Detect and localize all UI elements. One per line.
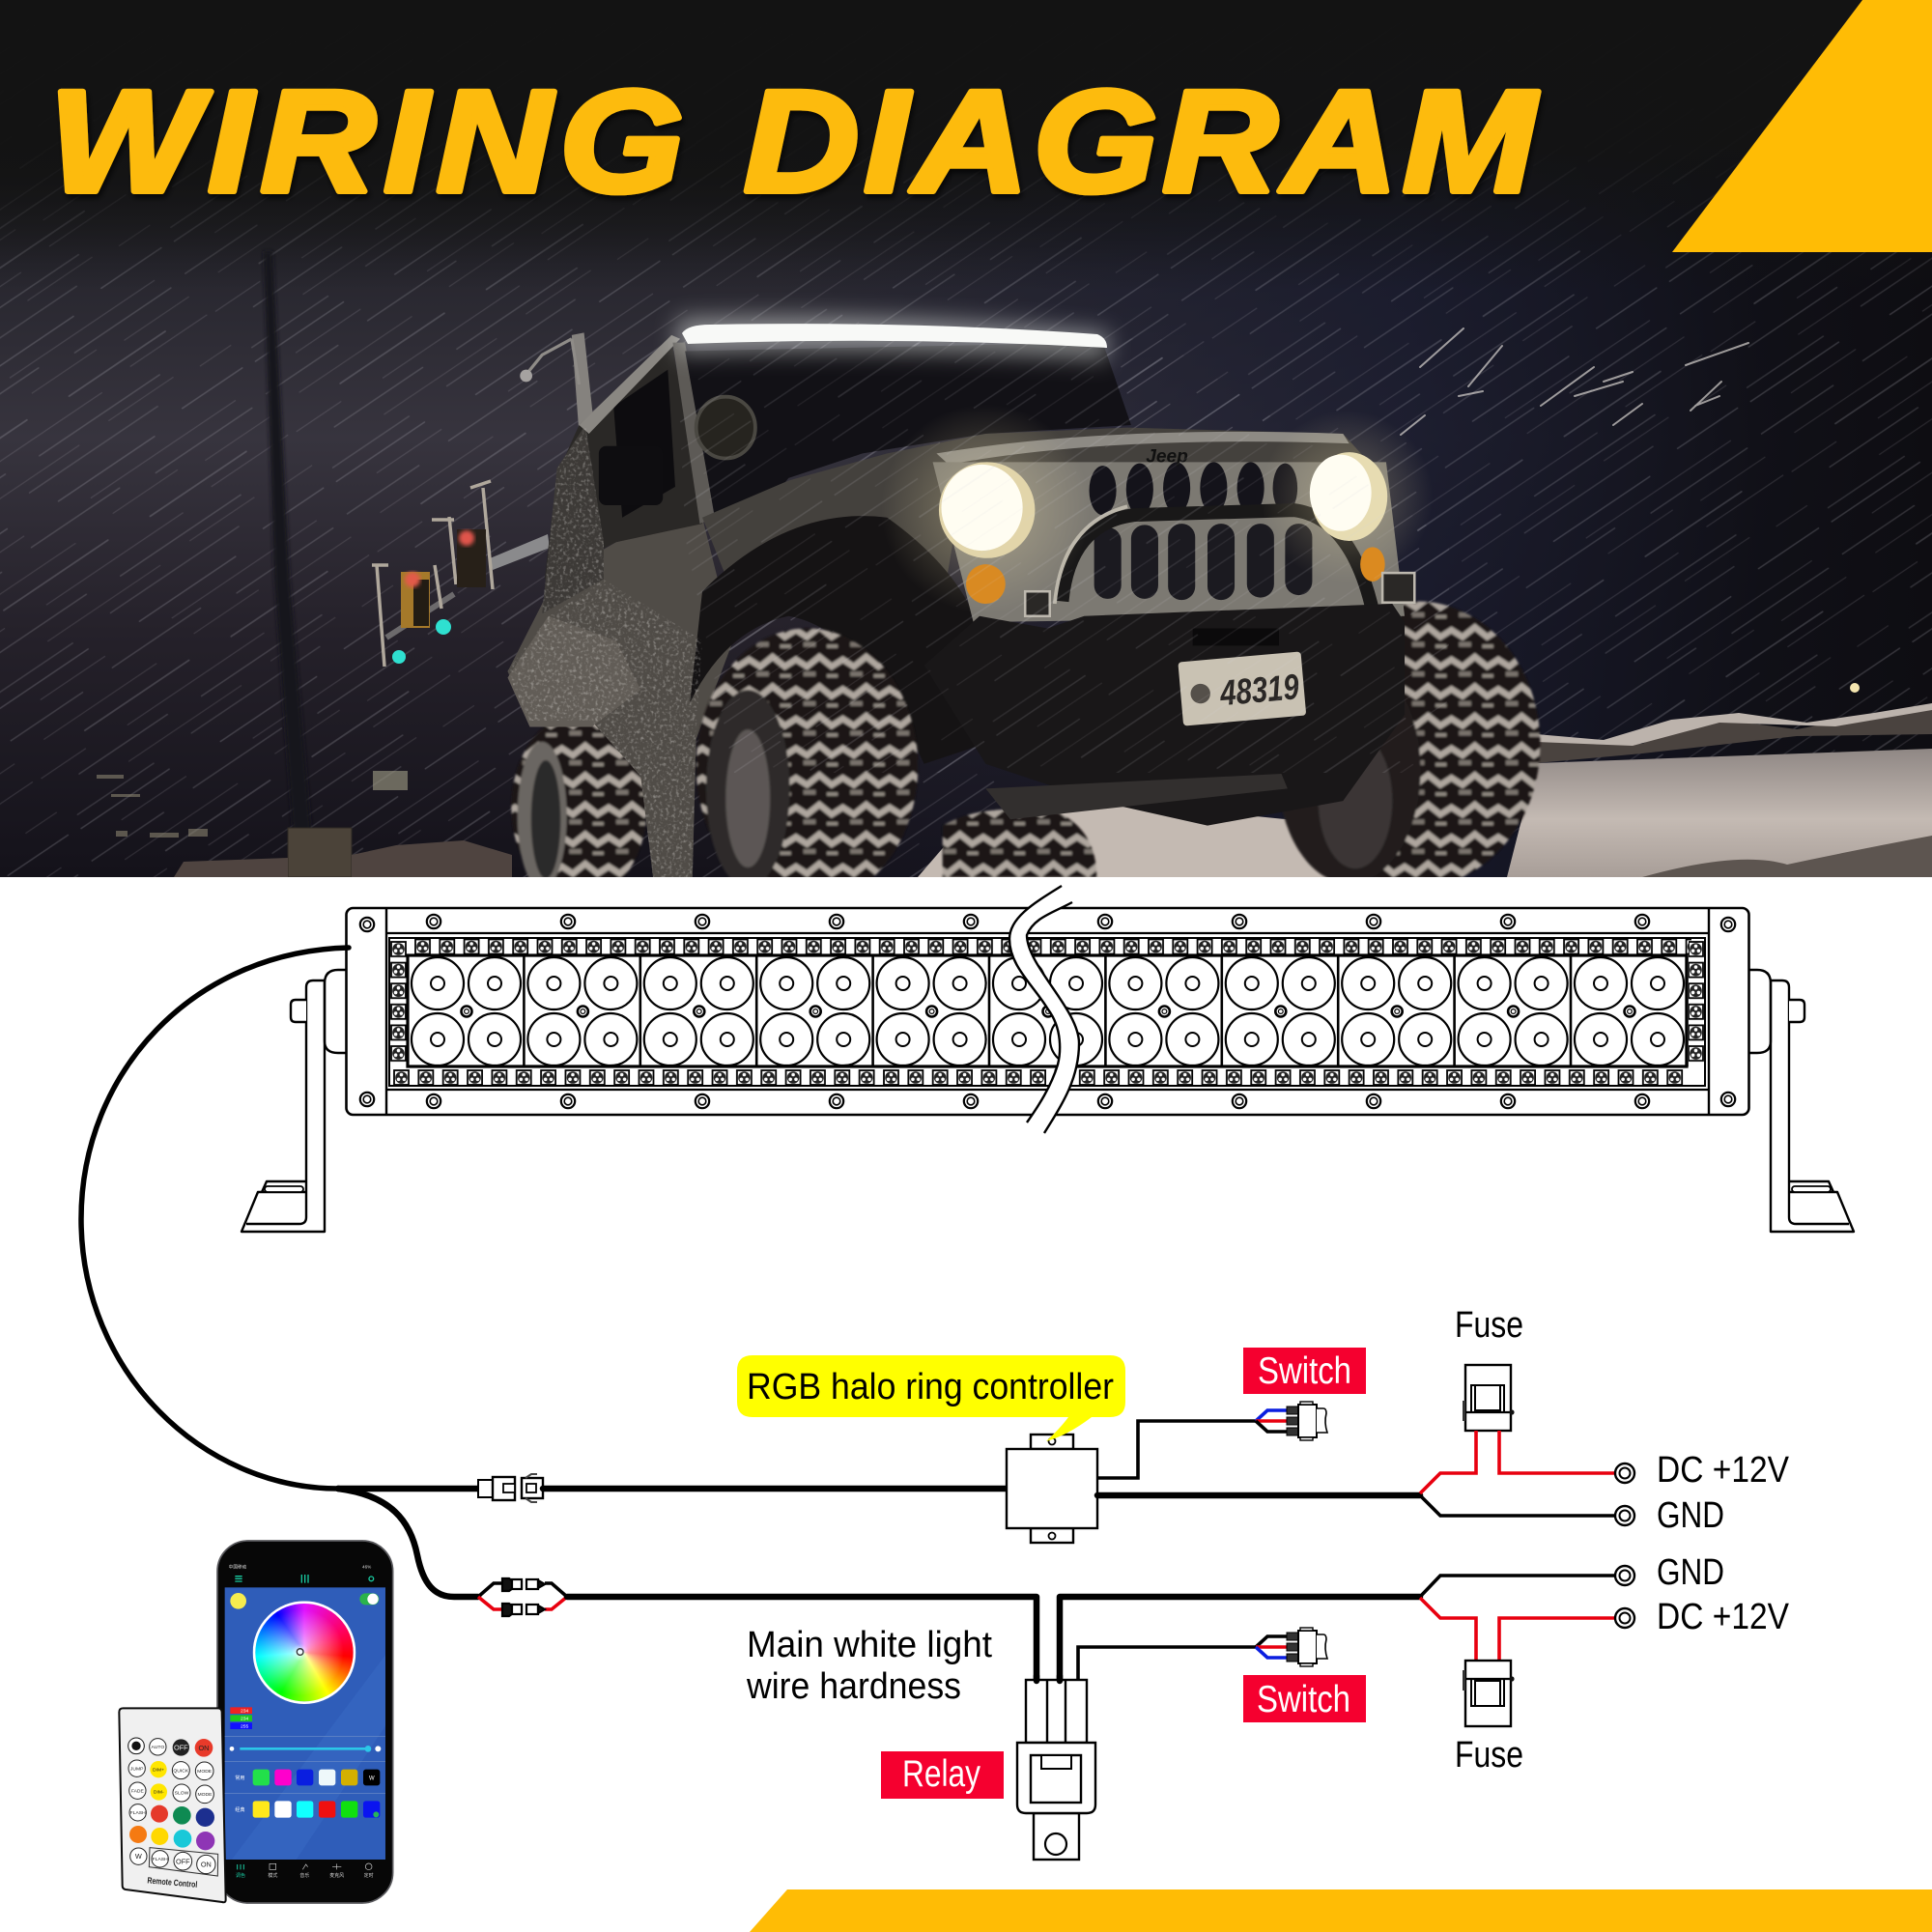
mirror [599, 446, 663, 505]
distant city lights [97, 771, 408, 838]
remote buttons row six: ON [201, 1861, 212, 1869]
remote control [119, 1708, 226, 1902]
label: DC +12V upper: DC +12V [1657, 1450, 1790, 1491]
swatch row two [235, 1801, 380, 1818]
right mount bracket [1749, 970, 1854, 1232]
hood front edge [936, 432, 1350, 465]
remote buttons row three: DIM- [154, 1790, 164, 1796]
relay [1017, 1680, 1095, 1860]
smartphone app [217, 1541, 393, 1903]
tab bar: 模式 [268, 1872, 277, 1879]
bull bar [1062, 510, 1374, 616]
cab side dark area [545, 339, 702, 579]
label: DC +12V lower: DC +12V [1657, 1597, 1790, 1637]
licence plate: 48319 [1218, 667, 1301, 713]
main harness wire from light bar [81, 948, 349, 1489]
status bar: 中国移动 [229, 1563, 247, 1570]
RGB controller box [1007, 1435, 1097, 1543]
roof post and side mirror arm [520, 332, 594, 434]
title band triangle [1672, 0, 1932, 252]
colour preview [230, 1593, 246, 1609]
hero photo: jeep with light bar in snowstorm [0, 0, 1932, 904]
rear tire [510, 724, 647, 877]
remote buttons row two: MODE [197, 1769, 213, 1775]
remote buttons row six: OFF [176, 1857, 190, 1865]
remote buttons row three [129, 1782, 213, 1804]
remote buttons row three: FADE [131, 1788, 145, 1794]
snow streak texture [0, 169, 1932, 877]
traffic lights [372, 481, 550, 667]
remote buttons row two [128, 1760, 213, 1780]
jeep vehicle [508, 332, 1540, 904]
remote buttons row five [129, 1826, 214, 1850]
title [49, 61, 1539, 222]
RGB readout: 234 [241, 1717, 249, 1722]
white light wire right [1060, 1597, 1420, 1681]
bumper and underbody [924, 604, 1405, 826]
main light plug connector [478, 1578, 567, 1616]
tab bar [236, 1863, 374, 1879]
top dark fade [0, 0, 1932, 290]
label: main white light wire harness [746, 1625, 992, 1707]
remote buttons row four: FLASH [130, 1810, 146, 1816]
dividers [225, 1736, 385, 1794]
controller power wire [1097, 1492, 1420, 1498]
relay wire ends [1037, 1676, 1060, 1681]
controller switch wire [1097, 1421, 1256, 1478]
label: lower fuse: Fuse [1455, 1735, 1523, 1776]
A-pillar [672, 343, 715, 524]
RGB readout: 234 [241, 1709, 249, 1715]
remote buttons row six: W [135, 1852, 142, 1861]
label: relay: Relay [902, 1753, 980, 1795]
status bar [229, 1563, 371, 1570]
bar screws [360, 915, 1735, 1108]
roof rail [579, 335, 680, 434]
bright snow streaks [1401, 328, 1748, 435]
winch [1193, 629, 1279, 645]
side window [613, 370, 675, 518]
swatch row one [235, 1770, 380, 1785]
bumper rail highlight [985, 774, 1288, 819]
rear fender highlight [508, 616, 640, 727]
remote buttons row six [130, 1848, 218, 1876]
swatch row two: 经典 [235, 1806, 244, 1813]
swatch row one: 常用 [235, 1775, 244, 1781]
tab bar: 调色 [236, 1872, 245, 1879]
LED light bar diagram [242, 886, 1854, 1232]
RGB wire to controller [543, 1486, 1007, 1492]
remote buttons row six: FLASH [153, 1857, 168, 1862]
upper switch [1256, 1402, 1327, 1440]
terminal: DC +12V upper [1615, 1463, 1634, 1483]
upper power branch wires [1420, 1431, 1614, 1516]
lower grille slots [1094, 524, 1312, 600]
turn signal left [966, 564, 1006, 604]
harness wire to RGB plug [338, 1486, 478, 1492]
remote buttons row one: OFF [174, 1744, 188, 1752]
label: upper fuse: Fuse [1455, 1305, 1523, 1346]
remote buttons row two: DIM+ [153, 1767, 164, 1773]
night sky [0, 98, 1932, 877]
relay switch wire [1078, 1647, 1256, 1680]
terminal: DC +12V lower [1615, 1608, 1634, 1628]
snow-covered side rail [542, 425, 604, 613]
pole concrete base [288, 828, 352, 877]
length break mark [1009, 886, 1079, 1133]
remote buttons row two: QUICK [173, 1768, 189, 1774]
swatch row one: W [369, 1776, 375, 1781]
bull bar highlight [1055, 506, 1127, 604]
bar housing [346, 908, 1748, 1115]
headlight left [881, 404, 1091, 613]
snow patch ground left [174, 840, 512, 877]
tab bar: 麦克风 [329, 1872, 344, 1879]
headlight right [1261, 411, 1433, 582]
power toggle [359, 1593, 379, 1605]
street lamp pole [264, 251, 311, 831]
pod lights [1025, 573, 1414, 616]
body side [508, 518, 733, 877]
lower switch [1256, 1628, 1327, 1666]
brightness slider [230, 1746, 381, 1752]
perimeter screws on strip edges [390, 938, 1705, 1086]
roof LED light bar glow [676, 317, 1109, 359]
terminal: GND lower [1615, 1566, 1634, 1585]
status bar: 46% [362, 1564, 371, 1569]
front panel [933, 462, 1405, 622]
upper fuse [1463, 1365, 1515, 1431]
remote buttons row three: SLOW [175, 1791, 189, 1797]
label: upper switch: Switch [1258, 1350, 1351, 1392]
turn signal right [1360, 547, 1385, 582]
tab bar: 定时 [364, 1872, 374, 1879]
remote buttons row four [129, 1804, 214, 1827]
licence plate [1178, 651, 1306, 726]
branch wire to main white harness [338, 1489, 478, 1597]
label: main white light wire harness: Main white light [747, 1625, 992, 1665]
white light wire left [567, 1597, 1037, 1681]
front left tire [696, 629, 918, 904]
label: GND lower: GND [1657, 1552, 1724, 1593]
upper grille slots [1090, 462, 1297, 515]
street light right [1850, 683, 1860, 693]
label: GND upper: GND [1657, 1495, 1724, 1536]
header icons [235, 1575, 374, 1583]
RGB plug connector [478, 1474, 543, 1502]
hood [702, 427, 1362, 573]
windshield circular sticker [696, 397, 755, 458]
remote buttons row one: ON [198, 1744, 209, 1752]
snow speckle on jeep side [0, 0, 1932, 877]
lower power branch wires [1420, 1576, 1614, 1662]
centre rear tire [943, 810, 1096, 877]
terminal: GND upper [1615, 1506, 1634, 1525]
faint streak overlay [676, 338, 1449, 773]
title: DIAGRAM [744, 61, 1539, 222]
label: main white light wire harness: wire hardness [746, 1666, 961, 1707]
remote buttons row one: AUTO [151, 1745, 164, 1750]
windshield [685, 343, 1131, 529]
wheel picker [297, 1649, 303, 1655]
colour wheel [253, 1601, 355, 1704]
remote buttons row one [128, 1738, 213, 1757]
app screen [225, 1587, 385, 1860]
tab bar: 音乐 [299, 1872, 309, 1879]
title: WIRING [49, 61, 684, 222]
RGB readout: 255 [241, 1724, 249, 1730]
front right tire [1278, 601, 1540, 887]
remote buttons row three: MODE [198, 1792, 213, 1798]
snow ground right [1507, 703, 1932, 877]
remote caption: Remote Control [147, 1875, 198, 1889]
RGB readout [230, 1707, 252, 1730]
remote buttons row two: JUMP [130, 1766, 144, 1772]
bottom yellow band [750, 1889, 1932, 1932]
fender with dark wheel well [690, 516, 998, 764]
label: lower switch: Switch [1257, 1679, 1350, 1720]
yellow callout [737, 1355, 1125, 1441]
LED modules [408, 955, 1687, 1066]
left mount bracket [242, 970, 346, 1232]
jeep badge: Jeep [1146, 446, 1188, 467]
label: relay [881, 1751, 1004, 1799]
yellow callout: RGB halo ring controller [747, 1367, 1114, 1407]
snow ground centre [918, 802, 1333, 877]
lower fuse [1463, 1661, 1515, 1726]
